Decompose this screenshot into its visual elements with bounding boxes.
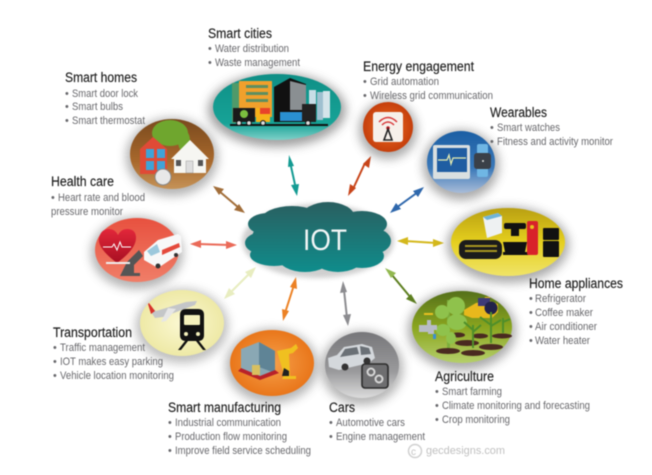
text: transportation: Traffic management	[60, 342, 145, 354]
text: smart cities: •	[208, 57, 212, 69]
text: smart manufacturing	[168, 400, 311, 457]
text: smart manufacturing: Smart manufacturing	[168, 400, 281, 415]
text: agriculture: Agriculture	[435, 369, 494, 384]
text: transportation: Transportation	[53, 325, 132, 340]
watermark: c	[411, 447, 416, 458]
text: health care: •	[51, 192, 55, 204]
text: smart manufacturing: Production flow monitoring	[175, 431, 287, 443]
text: smart cities	[208, 26, 300, 69]
text: smart manufacturing: •	[168, 417, 172, 429]
text: agriculture	[435, 369, 590, 426]
text: cars: •	[329, 417, 333, 429]
arrow: transportation	[224, 267, 256, 299]
text: agriculture: •	[435, 400, 439, 412]
text: smart cities: Waste management	[215, 57, 300, 69]
text: health care: Health care	[51, 174, 114, 189]
arrow: smart homes	[213, 186, 245, 213]
text: home appliances	[529, 276, 623, 347]
text: home appliances: Home appliances	[529, 276, 623, 291]
text: smart homes: Smart bulbs	[72, 101, 124, 113]
text: cars: Cars	[329, 400, 355, 415]
text: transportation	[53, 325, 174, 382]
arrow: energy engagement	[348, 156, 371, 196]
icon: houses and thermostat	[140, 120, 209, 185]
text: wearables: Fitness and activity monitor	[497, 136, 613, 148]
text: energy engagement: •	[363, 90, 367, 102]
panel: energy engagement	[359, 101, 417, 159]
text: cars: Automotive cars	[336, 417, 406, 429]
text: agriculture: •	[435, 414, 439, 426]
text: cars: Engine management	[336, 431, 425, 443]
arrow: cars	[340, 281, 351, 326]
central cloud: IOT	[242, 202, 394, 278]
text: smart homes: Smart thermostat	[72, 115, 145, 127]
text: energy engagement: Energy engagement	[363, 59, 474, 74]
text: wearables: •	[490, 136, 494, 148]
arrow: smart cities	[288, 155, 299, 196]
text: transportation: IOT makes easy parking	[60, 356, 163, 368]
text: home appliances: •	[529, 307, 533, 319]
text: smart homes: Smart door lock	[72, 88, 139, 100]
text: transportation: •	[53, 342, 57, 354]
text: wearables: Wearables	[490, 105, 547, 120]
panel: agriculture	[408, 290, 516, 370]
text: energy engagement	[363, 59, 493, 102]
arrow: home appliances	[397, 237, 444, 247]
icon: car and gears	[328, 344, 388, 388]
panel: smart manufacturing	[226, 329, 318, 403]
text: health care: pressure monitor	[51, 206, 123, 218]
panel: cars	[321, 331, 403, 405]
cloud label: IOT	[303, 224, 347, 257]
icon: plane and train	[148, 301, 206, 350]
panel: transportation	[136, 289, 228, 363]
text: health care: Heart rate and blood	[58, 192, 145, 204]
text: home appliances: Refrigerator	[535, 293, 586, 305]
icon: wireless tower	[373, 112, 403, 142]
text: agriculture: Climate monitoring and forecasting	[442, 400, 590, 412]
text: energy engagement: Wireless grid communication	[370, 90, 493, 102]
text: smart homes: Smart homes	[65, 70, 137, 85]
text: smart manufacturing: Industrial communication	[175, 417, 281, 429]
panel: health care	[91, 217, 183, 289]
text: smart manufacturing: Improve field service scheduling	[175, 445, 311, 457]
text: smart homes: •	[65, 101, 69, 113]
text: wearables: Smart watches	[497, 122, 561, 134]
panel: smart cities	[208, 73, 346, 147]
text: cars: •	[329, 431, 333, 443]
text: transportation: •	[53, 356, 57, 368]
arrow: smart manufacturing	[282, 277, 297, 321]
text: home appliances: •	[529, 321, 533, 333]
text: smart homes: •	[65, 115, 69, 127]
text: home appliances: Air conditioner	[535, 321, 597, 333]
icon: factory and robot arm	[238, 342, 298, 380]
text: energy engagement: •	[363, 76, 367, 88]
text: home appliances: Water heater	[535, 335, 590, 347]
text: smart homes: •	[65, 88, 69, 100]
text: transportation: Vehicle location monitoring	[60, 370, 174, 382]
text: smart cities: Water distribution	[215, 43, 289, 55]
text: energy engagement: Grid automation	[370, 76, 439, 88]
icon: monitor and watch	[433, 144, 491, 179]
text: agriculture: Smart farming	[442, 386, 502, 398]
arrow: wearables	[390, 187, 424, 213]
icon: appliances	[459, 213, 559, 259]
text: cars	[329, 400, 425, 443]
text: transportation: •	[53, 370, 57, 382]
arrow: agriculture	[385, 268, 417, 304]
icon: heart, microscope and ambulance	[99, 229, 182, 276]
text: agriculture: Crop monitoring	[442, 414, 510, 426]
text: smart manufacturing: •	[168, 445, 172, 457]
text: wearables	[490, 105, 613, 148]
panel: home appliances	[447, 207, 569, 283]
arrow: health care	[190, 240, 237, 249]
text: home appliances: •	[529, 335, 533, 347]
icon: plants, tractor and tap	[419, 297, 512, 356]
text: home appliances: Coffee maker	[535, 307, 593, 319]
text: health care	[51, 174, 145, 218]
text: smart cities: •	[208, 43, 212, 55]
text: smart homes	[65, 70, 145, 127]
watermark: gecdesigns.com	[426, 445, 505, 457]
panel: wearables	[423, 130, 499, 200]
text: smart cities: Smart cities	[208, 26, 272, 41]
panel: smart homes	[126, 118, 218, 196]
text: agriculture: •	[435, 386, 439, 398]
text: smart manufacturing: •	[168, 431, 172, 443]
text: wearables: •	[490, 122, 494, 134]
text: home appliances: •	[529, 293, 533, 305]
icon: city and trucks	[230, 78, 330, 126]
